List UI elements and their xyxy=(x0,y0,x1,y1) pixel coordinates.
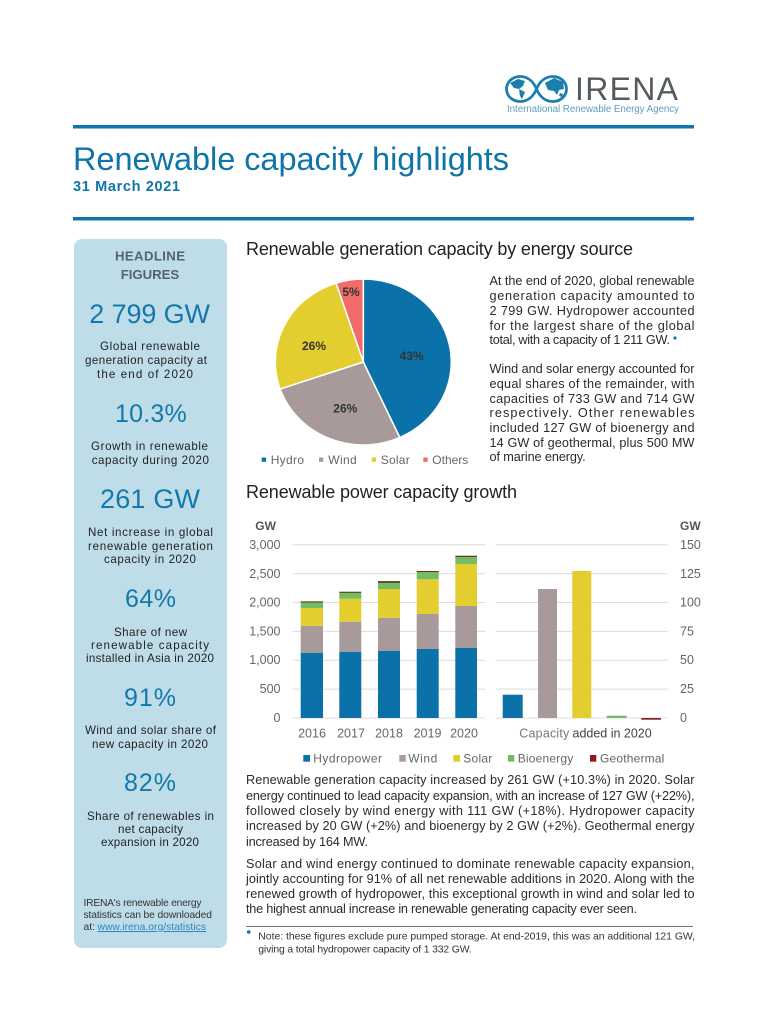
text block: capacity growth paragraph 1: followed closely by wind energy with 111 GW (+18%). Hydropower capacity xyxy=(246,804,695,818)
right axis labels xyxy=(680,538,701,725)
chart legend: Solar xyxy=(463,752,492,766)
bar: 2019 xyxy=(417,571,439,718)
text block: capacity summary xyxy=(490,274,695,464)
figure: 64% xyxy=(86,585,214,665)
top rule xyxy=(73,125,694,128)
bar: 2020 xyxy=(455,556,477,718)
panel heading: FIGURES xyxy=(121,267,179,282)
figure: 261 GW: renewable generation xyxy=(88,540,213,553)
footnote xyxy=(246,926,695,956)
left axis labels: 2,000 xyxy=(249,596,281,610)
figure: 82%: Share of renewables in xyxy=(87,810,214,823)
year labels: 2019 xyxy=(414,726,441,740)
figure: 82%: 82% xyxy=(124,769,176,797)
year labels: 2017 xyxy=(337,726,365,740)
right axis labels: 50 xyxy=(680,653,694,667)
text block: capacity summary: capacities of 733 GW and 714 GW xyxy=(490,392,695,406)
text block: capacity growth paragraph 1: Renewable generation capacity increased by 261 GW (+10.3%) in 2020. Solar xyxy=(246,773,695,787)
pie labels: 5% xyxy=(342,285,360,299)
text block: capacity summary: equal shares of the remainder, with xyxy=(490,377,694,391)
footnote: Note: these figures exclude pure pumped storage. At end-2019, this was an additional 121 GW, xyxy=(258,932,695,942)
panel heading xyxy=(115,248,185,282)
text block: capacity growth paragraph 1 xyxy=(246,773,695,849)
chart legend: Geothermal xyxy=(600,752,664,766)
figure: 2 799 GW: Global renewable xyxy=(100,340,200,353)
heading: capacity growth: Renewable power capacity growth xyxy=(246,482,517,502)
pie legend xyxy=(262,453,468,467)
left axis labels: 1,000 xyxy=(249,653,281,667)
text block: capacity summary: 14 GW of geothermal, plus 500 MW xyxy=(490,436,695,450)
axis title: GW xyxy=(255,519,277,533)
text block: capacity summary: total, with a capacity of 1 211 GW. xyxy=(490,333,670,347)
text block: capacity summary: of marine energy. xyxy=(490,450,586,464)
bar: 2017 xyxy=(339,592,361,718)
figure: 64%: installed in Asia in 2020 xyxy=(86,652,214,665)
figure: 91%: new capacity in 2020 xyxy=(92,738,208,751)
left axis labels: 2,500 xyxy=(249,567,281,581)
figure: 91% xyxy=(85,684,217,751)
bar: bioenergy added xyxy=(607,716,627,718)
year labels: 2018 xyxy=(375,726,403,740)
pie labels: 26% xyxy=(302,339,326,353)
text block: capacity summary: 2 799 GW. Hydropower accounted xyxy=(490,304,694,318)
figure: 10.3%: Growth in renewable xyxy=(91,440,208,453)
axis caption: added in 2020 xyxy=(572,726,652,740)
text block: capacity growth paragraph 2: renewed growth of hydropower, this exceptional growth in wind and solar led to xyxy=(246,887,694,901)
pie legend: Wind xyxy=(328,453,357,467)
statistics note with link: at: xyxy=(84,922,95,933)
statistics note with link xyxy=(84,898,212,933)
left axis labels: 1,500 xyxy=(249,624,281,638)
bar: 2018 xyxy=(378,581,400,718)
text block: capacity growth paragraph 2: jointly accounting for 91% of all net renewable additions in 2020. Along with the xyxy=(245,872,694,886)
figure: 82%: expansion in 2020 xyxy=(101,836,199,849)
text block: capacity summary: for the largest share of the global xyxy=(490,319,694,333)
right axis labels: 150 xyxy=(680,538,701,552)
logo: IRENA: IRENA xyxy=(575,71,679,107)
statistics note with link: IRENA's renewable energy xyxy=(84,898,202,909)
left axis labels xyxy=(249,538,281,725)
chart legend: Wind xyxy=(408,752,437,766)
bar: wind added xyxy=(538,589,557,718)
right axis labels: 100 xyxy=(680,596,701,610)
logo: IRENA xyxy=(506,71,679,115)
figure: 64%: 64% xyxy=(125,585,176,613)
figure: 261 GW: Net increase in global xyxy=(88,526,213,539)
figure: 91%: Wind and solar share of xyxy=(85,724,217,737)
figure: 64%: Share of new xyxy=(114,626,188,639)
text block: capacity growth paragraph 1: increased by 20 GW (+2%) and bioenergy by 2 GW (+2%). Geothermal energy xyxy=(246,819,695,833)
text block: capacity summary: generation capacity amounted to xyxy=(490,289,694,303)
figure: 10.3%: capacity during 2020 xyxy=(92,454,209,467)
title: Renewable capacity highlights xyxy=(73,141,509,177)
chart legend: Hydropower xyxy=(313,752,382,766)
slice: wind xyxy=(280,362,400,445)
figure: 261 GW: 261 GW xyxy=(100,484,201,514)
right axis title: GW xyxy=(680,519,701,533)
second rule xyxy=(73,217,694,220)
left axis labels: 500 xyxy=(260,682,281,696)
pie legend: Solar xyxy=(381,453,410,467)
text block: capacity growth paragraph 2: the highest annual increase in renewable generating capacity ever seen. xyxy=(246,902,637,916)
right axis labels: 75 xyxy=(680,624,694,638)
text block: capacity growth paragraph 1: energy continued to lead capacity expansion, with an increase of 127 GW (+22%), xyxy=(246,789,694,803)
bar: hydropower added xyxy=(503,695,523,718)
pie labels xyxy=(302,285,424,416)
panel heading: HEADLINE xyxy=(115,248,185,264)
slice: others xyxy=(336,279,363,362)
right axis labels: 25 xyxy=(680,682,694,696)
figure: 261 GW: capacity in 2020 xyxy=(104,553,196,566)
footnote: giving a total hydropower capacity of 1 332 GW. xyxy=(258,944,472,956)
figure: 64%: renewable capacity xyxy=(91,639,209,652)
year labels xyxy=(298,726,478,740)
figure: 10.3% xyxy=(91,400,209,467)
pie legend: Others xyxy=(432,453,468,467)
text block: capacity growth paragraph 2: Solar and wind energy continued to dominate renewable capacity expansion, xyxy=(246,857,694,871)
slice: solar xyxy=(275,283,363,389)
bar: 2016 xyxy=(301,601,323,718)
chart legend: Bioenergy xyxy=(518,752,573,766)
panel: headline figures xyxy=(74,239,227,948)
figure: 91%: 91% xyxy=(124,684,176,712)
bar: geothermal added xyxy=(641,718,661,720)
text block: capacity summary: included 127 GW of bioenergy and xyxy=(490,421,694,435)
year labels: 2016 xyxy=(298,726,326,740)
pie labels: 26% xyxy=(333,402,358,416)
date: 31 March 2021 xyxy=(73,179,180,195)
chart legend xyxy=(303,752,664,766)
text block: capacity summary: Wind and solar energy accounted for xyxy=(490,362,695,376)
right axis labels: 0 xyxy=(680,711,687,725)
figure: 82% xyxy=(87,769,214,849)
axis caption: Capacity xyxy=(519,726,570,740)
slice: hydro xyxy=(363,279,451,438)
bar: solar added xyxy=(572,571,591,718)
text block: capacity summary: respectively. Other renewables xyxy=(490,406,694,420)
heading: generation capacity by source: Renewable generation capacity by energy source xyxy=(246,239,633,259)
pie legend: Hydro xyxy=(271,453,304,467)
pie labels: 43% xyxy=(400,349,424,363)
axis caption xyxy=(519,726,652,740)
year labels: 2020 xyxy=(450,726,478,740)
text block: capacity summary: At the end of 2020, global renewable xyxy=(490,274,694,288)
text block: capacity growth paragraph 1: increased by 164 MW. xyxy=(246,835,368,849)
right axis labels: 125 xyxy=(680,567,701,581)
figure: 10.3%: 10.3% xyxy=(115,400,187,428)
figure: 2 799 GW: generation capacity at xyxy=(85,354,208,367)
pie chart xyxy=(275,279,451,445)
stacked bar chart: total capacity xyxy=(249,519,485,740)
logo: IRENA: International Renewable Energy Agency xyxy=(507,104,679,115)
bar chart: capacity added in 2020 xyxy=(496,519,701,740)
left axis labels: 3,000 xyxy=(249,538,281,552)
figure: 2 799 GW: the end of 2020 xyxy=(97,368,193,381)
left axis labels: 0 xyxy=(274,711,281,725)
text block: capacity growth paragraph 2 xyxy=(245,857,694,916)
figure: 2 799 GW: 2 799 GW xyxy=(89,299,211,329)
statistics note with link: www.irena.org/statistics xyxy=(96,922,206,933)
figure: 2 799 GW xyxy=(85,299,211,381)
statistics note with link: statistics can be downloaded xyxy=(84,910,212,921)
figure: 261 GW xyxy=(88,484,213,566)
figure: 82%: net capacity xyxy=(118,823,183,836)
